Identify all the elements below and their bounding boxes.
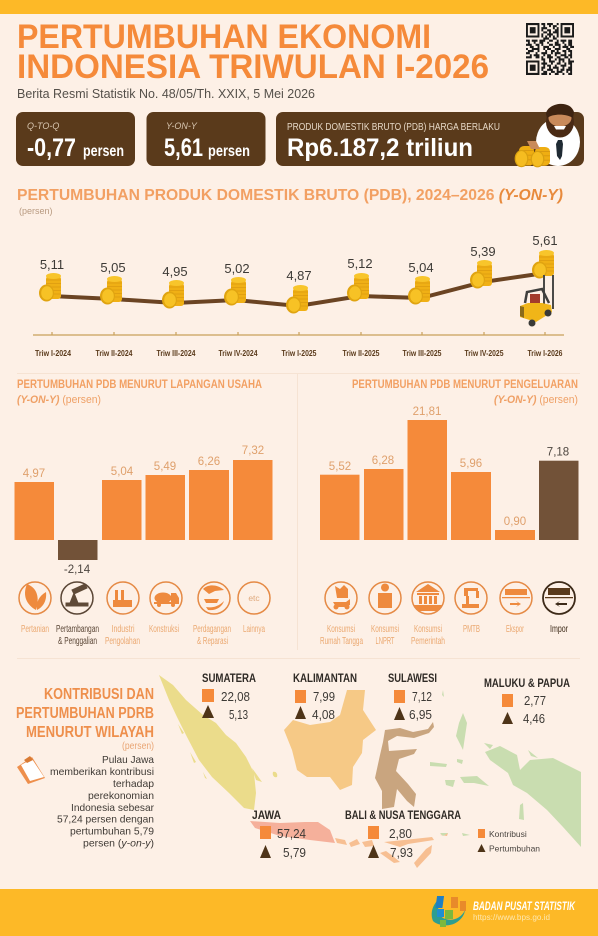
footer band <box>0 889 598 936</box>
top band <box>0 0 598 14</box>
data: Sulawesi: 7,12 <box>412 689 432 704</box>
icons row: expenditure <box>325 582 575 614</box>
text block: regional note: Indonesia sebesar <box>71 802 154 814</box>
labels: industries: Pertanian <box>21 624 49 635</box>
bar chart: industry: 5,04 <box>111 466 134 478</box>
icons row: industries: etc <box>248 593 260 603</box>
data: Jawa: JAWA <box>252 808 281 822</box>
line chart: Triw IV-2024 <box>218 349 258 358</box>
line chart: 5,05 <box>100 260 126 275</box>
stat card: Y-on-Y <box>146 112 266 166</box>
icons row: industries <box>19 582 270 614</box>
text block: regional note: persen (y-on-y) <box>83 838 154 850</box>
data: Kalimantan <box>293 671 357 722</box>
panel: growth by expenditure: (Y-ON-Y) (persen) <box>494 394 578 406</box>
line chart <box>33 233 564 358</box>
map of Indonesia <box>159 675 581 868</box>
section dividers <box>17 373 580 658</box>
labels: expenditure: Rumah Tangga <box>320 636 363 647</box>
labels: industries: Konstruksi <box>149 624 179 635</box>
labels: industries: & Reparasi <box>197 636 228 647</box>
bar chart: expenditure: 5,52 <box>329 461 351 473</box>
region: Jawa <box>250 821 335 843</box>
region: Sulawesi <box>375 722 434 809</box>
unit: regional: (persen) <box>122 741 154 752</box>
stat card: Y-on-Y: persen <box>208 143 250 160</box>
labels: industries: Lainnya <box>243 624 265 635</box>
stat card: PDB: Rp6.187,2 triliun <box>287 134 473 162</box>
text block: regional note: memberikan kontribusi <box>50 766 154 778</box>
region: Maluku & Papua <box>430 690 581 847</box>
line chart: Triw I-2026 <box>528 349 563 358</box>
icon: clipboard <box>17 756 45 784</box>
data: Jawa <box>252 808 306 860</box>
line chart: 5,11 <box>40 257 64 272</box>
data: Jawa: 57,24 <box>277 826 306 841</box>
data: Bali & Nusa Tenggara: 7,93 <box>390 845 413 860</box>
line chart: 5,04 <box>408 260 434 275</box>
text block: regional note: terhadap <box>113 778 154 790</box>
data: Maluku & Papua <box>484 676 570 726</box>
bar chart: expenditure: 6,28 <box>372 455 394 467</box>
line chart: Triw I-2025 <box>282 349 317 358</box>
stat card: Q-to-Q: persen <box>83 143 124 160</box>
data: Sumatera <box>202 671 256 722</box>
labels: expenditure: Pemerintah <box>411 636 445 647</box>
bar chart: industry: 7,32 <box>242 445 264 457</box>
icon: businessman with coins <box>515 104 580 167</box>
labels: expenditure: Ekspor <box>506 624 524 635</box>
text block: regional note: perekonomian <box>88 790 154 802</box>
bar chart: industry: 5,49 <box>154 461 176 473</box>
footer text: https://www.bps.go.id <box>473 912 550 922</box>
bar chart: expenditure: 21,81 <box>413 406 441 418</box>
map legend: Pertumbuhan <box>489 844 540 854</box>
data: Sulawesi <box>388 671 437 722</box>
data: Sumatera: SUMATERA <box>202 671 256 685</box>
heading: regional: PERTUMBUHAN PDRB <box>16 705 154 722</box>
data: Maluku & Papua: MALUKU & PAPUA <box>484 676 570 690</box>
line chart: Triw I-2024 <box>35 349 71 358</box>
data: Sulawesi: SULAWESI <box>388 671 437 685</box>
line chart: 5,02 <box>224 261 250 276</box>
map legend: Kontribusi <box>489 829 527 839</box>
line chart: 5,39 <box>470 244 496 259</box>
labels: expenditure: Konsumsi <box>327 624 355 635</box>
labels: expenditure: Konsumsi <box>414 624 442 635</box>
line chart: Triw III-2024 <box>156 349 196 358</box>
panel: growth by industry: PERTUMBUHAN PDB MENURUT LAPANGAN USAHA <box>17 379 262 391</box>
bar chart: expenditure: 0,90 <box>504 516 526 528</box>
text block: regional note: 57,24 persen dengan <box>57 814 154 826</box>
bar chart: industry: 4,97 <box>23 468 45 480</box>
icon: forklift <box>520 275 553 326</box>
heading: regional: KONTRIBUSI DAN <box>44 686 154 703</box>
data: Sumatera: 5,13 <box>229 707 248 722</box>
data: Bali & Nusa Tenggara: 2,80 <box>389 826 412 841</box>
data: Kalimantan: KALIMANTAN <box>293 671 357 685</box>
line chart: 4,95 <box>162 264 188 279</box>
labels: industries: Pertambangan <box>56 624 99 635</box>
text block: regional note: Pulau Jawa <box>102 754 154 766</box>
stat card: Q-to-Q: -0,77 <box>27 134 76 162</box>
data: Kalimantan: 4,08 <box>312 707 335 722</box>
stat card: PDB: PRODUK DOMESTIK BRUTO (PDB) HARGA BERLAKU <box>287 122 500 133</box>
data: Bali & Nusa Tenggara <box>345 808 461 860</box>
line chart: 4,87 <box>286 268 312 283</box>
region: Bali & Nusa Tenggara <box>335 833 448 868</box>
labels: expenditure <box>320 624 568 647</box>
stat card: Y-on-Y: Y-ON-Y <box>166 121 198 131</box>
panel: growth by industry <box>14 379 272 576</box>
line chart: 5,61 <box>532 233 558 248</box>
subtitle: Berita Resmi Statistik No. 48/05/Th. XXIX, 5 Mei 2026 <box>17 87 315 101</box>
stat card: Y-on-Y: 5,61 <box>164 134 203 162</box>
heading: regional: MENURUT WILAYAH <box>26 724 154 741</box>
text block: regional note: pertumbuhan 5,79 <box>70 826 154 838</box>
unit: (persen) <box>19 206 53 216</box>
title: PERTUMBUHAN EKONOMI <box>17 18 431 56</box>
labels: industries: Perdagangan <box>193 624 231 635</box>
title <box>17 18 489 86</box>
line chart: Triw II-2025 <box>342 349 380 358</box>
bar chart: expenditure: 5,96 <box>460 458 482 470</box>
footer text <box>473 899 576 922</box>
heading: regional <box>16 686 154 741</box>
stat card: Q-to-Q: Q-TO-Q <box>27 121 59 131</box>
data: Jawa: 5,79 <box>283 845 306 860</box>
panel: growth by industry: (Y-ON-Y) (persen) <box>17 394 101 406</box>
bar chart: industry: -2,14 <box>64 564 91 576</box>
labels: industries <box>21 624 265 647</box>
line chart: 5,12 <box>347 256 373 271</box>
heading: line chart: PERTUMBUHAN PRODUK DOMESTIK BRUTO (PDB), 2024–2026 (Y-ON-Y) <box>17 187 563 204</box>
bar chart: expenditure: 7,18 <box>547 447 569 459</box>
icon: BPS logo <box>432 896 466 927</box>
line chart: Triw III-2025 <box>402 349 442 358</box>
labels: industries: & Penggalian <box>58 636 97 647</box>
title: INDONESIA TRIWULAN I-2026 <box>17 48 489 86</box>
line chart: Triw II-2024 <box>96 349 133 358</box>
bar chart: industry <box>14 445 272 576</box>
labels: industries: Pengolahan <box>105 636 140 647</box>
QR code <box>526 24 574 74</box>
panel: growth by expenditure <box>320 379 578 540</box>
data: Maluku & Papua: 4,46 <box>523 711 545 726</box>
data: Maluku & Papua: 2,77 <box>524 693 546 708</box>
labels: expenditure: LNPRT <box>376 636 394 647</box>
bar chart: industry: 6,26 <box>198 456 220 468</box>
region: Kalimantan <box>284 690 376 790</box>
text block: regional note <box>50 754 154 850</box>
stat card: PDB <box>276 112 584 166</box>
region: Sumatera <box>159 675 277 810</box>
labels: industries: Industri <box>112 624 134 635</box>
labels: expenditure: Konsumsi <box>371 624 399 635</box>
data: Sumatera: 22,08 <box>221 689 250 704</box>
labels: expenditure: PMTB <box>463 624 480 635</box>
data: Bali & Nusa Tenggara: BALI & NUSA TENGGARA <box>345 808 461 822</box>
stat card: Q-to-Q <box>16 112 135 166</box>
data: Kalimantan: 7,99 <box>313 689 335 704</box>
line chart: Triw IV-2025 <box>464 349 504 358</box>
data: Sulawesi: 6,95 <box>409 707 432 722</box>
labels: expenditure: Impor <box>550 624 568 635</box>
bar chart: expenditure <box>320 406 578 540</box>
map legend <box>478 829 540 854</box>
